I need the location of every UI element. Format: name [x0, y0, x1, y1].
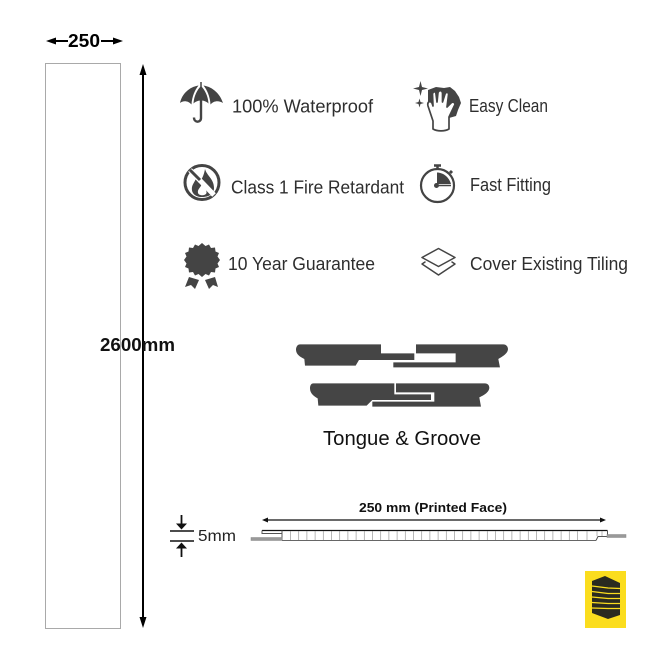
width dimension: 250: 250	[68, 31, 100, 51]
width dimension: 250	[46, 31, 123, 51]
feature: easy clean	[413, 81, 548, 131]
feature: fire retardant	[185, 166, 404, 200]
thickness dimension: 5mm: 5mm	[198, 528, 236, 545]
label: 250 mm (Printed Face): 250 mm (Printed Face)	[359, 501, 507, 515]
icon: building	[592, 576, 620, 619]
icon: stopwatch	[421, 166, 454, 202]
dimension arrow	[262, 518, 606, 522]
height arrow	[140, 64, 146, 628]
panel cross section with dimension	[251, 501, 626, 540]
label: 10 Year Guarantee: 10 Year Guarantee	[228, 254, 375, 274]
brand logo	[585, 571, 626, 628]
feature: waterproof	[180, 82, 374, 122]
top joint profile	[296, 344, 508, 367]
height label: 2600mm: 2600mm	[100, 335, 175, 355]
label: Fast Fitting: Fast Fitting	[470, 175, 551, 195]
cross section profile	[251, 530, 626, 540]
label: Easy Clean: Easy Clean	[469, 96, 548, 116]
icon: rosette badge	[184, 243, 220, 289]
feature: cover existing tiling	[422, 248, 628, 275]
feature: guarantee	[184, 243, 375, 289]
icon: hand wiping with sparkles	[413, 81, 461, 131]
label: 100% Waterproof: 100% Waterproof	[232, 96, 374, 116]
label: Cover Existing Tiling: Cover Existing Tiling	[470, 254, 628, 274]
thickness dimension: 5mm	[170, 515, 236, 557]
bottom joint profile	[310, 383, 489, 407]
icon: umbrella	[180, 82, 223, 122]
feature: fast fitting	[421, 166, 551, 202]
icon: layers	[422, 248, 455, 275]
tongue and groove diagram	[296, 344, 508, 450]
label: Tongue & Groove: Tongue & Groove	[323, 428, 481, 450]
label: Class 1 Fire Retardant: Class 1 Fire Retardant	[231, 178, 404, 198]
tall panel outline	[46, 64, 120, 628]
icon: no fire	[185, 166, 219, 200]
